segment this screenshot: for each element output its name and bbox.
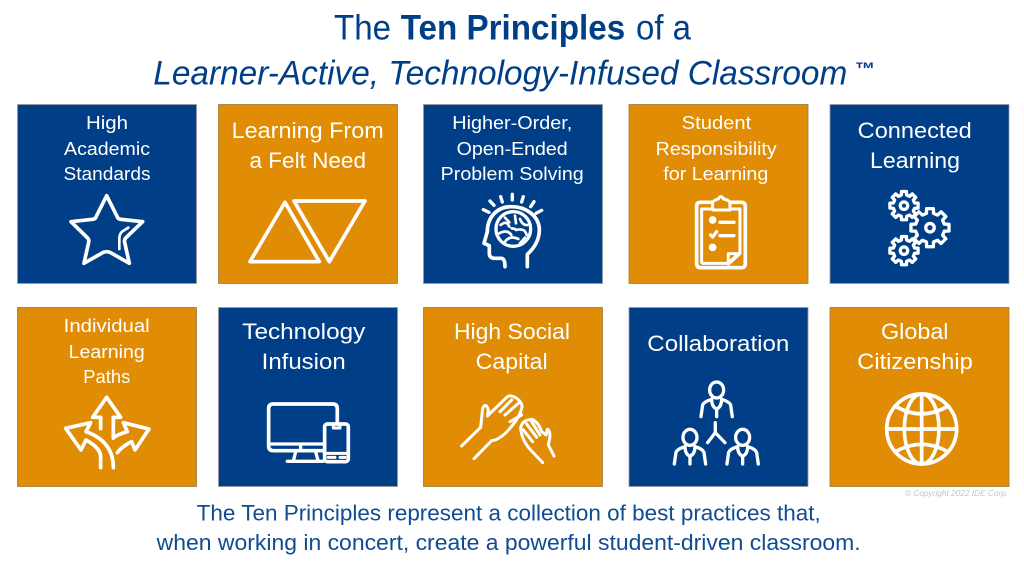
heading: Individual Learning Paths: Paths (83, 366, 130, 387)
icon: two triangles (250, 201, 365, 262)
heading: Technology Infusion: Infusion (262, 349, 346, 374)
heading: Student Responsibility for Learning (656, 112, 777, 184)
heading: Student Responsibility for Learning: Responsibility (656, 138, 777, 159)
heading: Technology Infusion: Technology (242, 319, 365, 344)
panel: Collaboration (629, 308, 808, 486)
panel: Connected Learning (830, 104, 1009, 284)
panel: Global Citizenship (830, 308, 1009, 486)
icon: two hands (462, 396, 554, 463)
heading: Higher-Order, Open-Ended Problem Solving: Open-Ended (457, 138, 568, 159)
heading: Learning From a Felt Need: Learning From (232, 118, 384, 143)
heading: Collaboration: Collaboration (647, 331, 789, 356)
icon: clipboard checklist (697, 197, 745, 268)
panel: Learning From a Felt Need (218, 104, 398, 284)
icon: diverging arrows (66, 397, 149, 468)
title (153, 8, 875, 92)
heading: Student Responsibility for Learning: for Learning (663, 163, 768, 184)
heading: Technology Infusion (242, 319, 365, 374)
icon: star (71, 196, 143, 263)
icon: monitor and phone (269, 404, 348, 462)
copyright note: © Copyright 2022 IDE Corp. (905, 489, 1008, 498)
title: Learner-Active, Technology-Infused Classroom (153, 54, 847, 92)
heading: High Academic Standards: Standards (64, 163, 150, 184)
summary text (156, 500, 861, 555)
heading: Learning From a Felt Need: a Felt Need (250, 148, 366, 173)
panel: Individual Learning Paths (18, 308, 196, 486)
heading: Global Citizenship (857, 319, 973, 374)
heading: Learning From a Felt Need (232, 118, 384, 173)
panel: Technology Infusion (218, 308, 398, 486)
heading: Global Citizenship: Global (881, 319, 948, 344)
title: Ten Principles (401, 8, 625, 48)
icon: three gears (890, 192, 949, 265)
title: The (334, 8, 391, 48)
panel: High Social Capital (424, 308, 602, 486)
heading: High Academic Standards: Academic (64, 138, 150, 159)
heading: Global Citizenship: Citizenship (857, 349, 973, 374)
heading: Individual Learning Paths (64, 315, 150, 387)
summary text: The Ten Principles represent a collection of best practices that, (197, 500, 821, 526)
panel: Student Responsibility for Learning (629, 104, 808, 284)
heading: Higher-Order, Open-Ended Problem Solving (441, 112, 584, 184)
heading: Student Responsibility for Learning: Student (682, 112, 751, 133)
heading: Individual Learning Paths: Learning (69, 341, 145, 362)
icon: globe (887, 394, 957, 464)
heading: High Social Capital (454, 319, 570, 374)
icon: head with brain (483, 194, 542, 267)
panel: Higher-Order, Open-Ended Problem Solving (424, 104, 602, 284)
heading: High Social Capital: Capital (476, 349, 548, 374)
summary text: when working in concert, create a powerful student-driven classroom. (156, 530, 861, 555)
title: of a (636, 8, 691, 48)
heading: High Academic Standards (64, 112, 150, 184)
heading: Connected Learning: Connected (858, 118, 972, 143)
heading: High Social Capital: High Social (454, 319, 570, 344)
title: ™ (855, 59, 875, 79)
heading: Higher-Order, Open-Ended Problem Solving: Problem Solving (441, 163, 584, 184)
heading: Connected Learning (858, 118, 972, 173)
heading: Individual Learning Paths: Individual (64, 315, 150, 336)
heading: Connected Learning: Learning (870, 148, 960, 173)
heading: High Academic Standards: High (86, 112, 128, 133)
heading: Higher-Order, Open-Ended Problem Solving: Higher-Order, (452, 112, 572, 133)
panel: High Academic Standards (18, 104, 196, 284)
icon: three connected people (674, 382, 758, 464)
